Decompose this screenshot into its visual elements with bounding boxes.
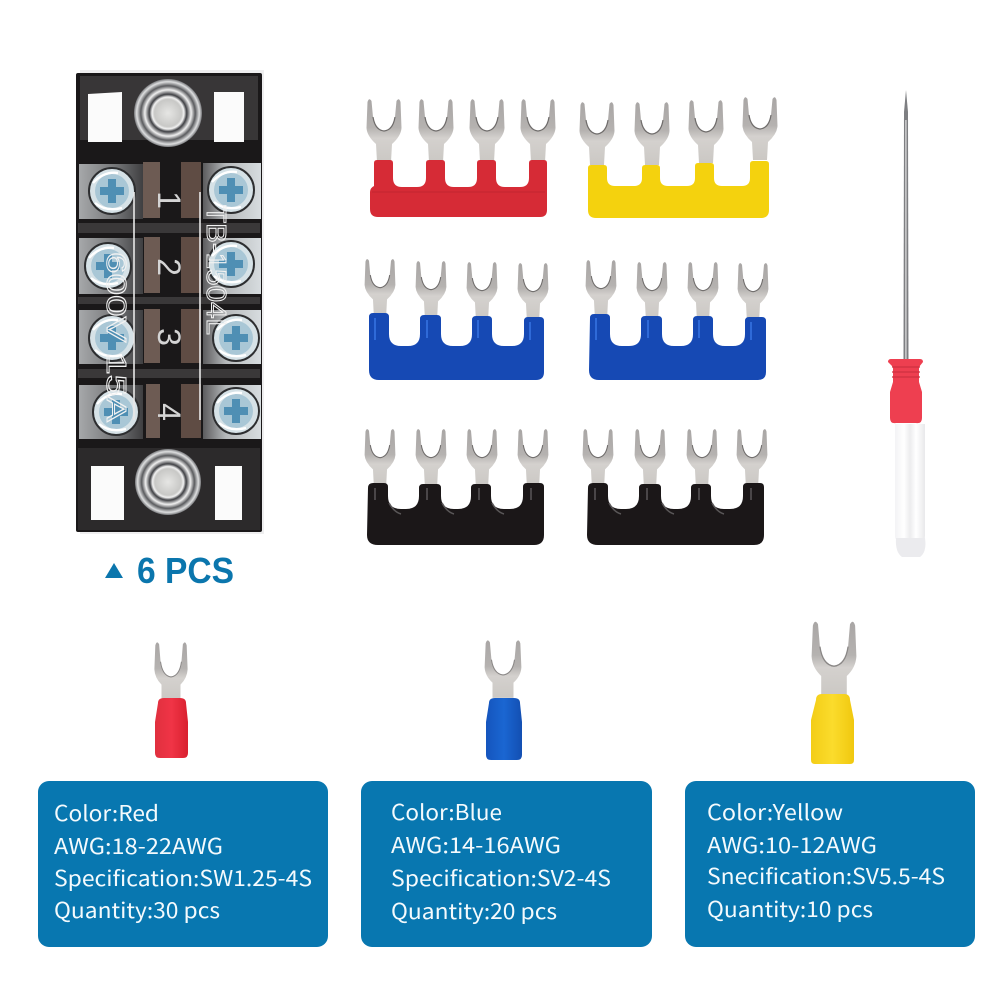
red spade terminal xyxy=(154,642,188,758)
bottom mounting bolt xyxy=(135,449,201,515)
terminal numbers xyxy=(151,191,187,421)
yellow jumper bar xyxy=(580,97,778,218)
card text: Color:Blue xyxy=(391,796,502,827)
screwdriver xyxy=(888,90,925,557)
card text: Quantity:20 pcs xyxy=(391,895,557,926)
card text xyxy=(391,796,611,926)
card text: Color:Yellow xyxy=(707,796,843,827)
screws xyxy=(85,167,259,435)
terminal numbers: 3 xyxy=(151,328,187,346)
card: blue spec xyxy=(361,781,652,947)
moulded rating text: TB-1504L xyxy=(201,205,232,335)
terminal block xyxy=(76,70,264,534)
card text: AWG:14-16AWG xyxy=(391,829,561,860)
blue jumper bar left xyxy=(365,259,548,380)
card text: Specification:SW1.25-4S xyxy=(54,862,312,893)
top mounting bolt xyxy=(134,79,202,147)
blue jumper bar right xyxy=(586,260,768,380)
card text: Quantity:10 pcs xyxy=(707,893,873,924)
card: yellow spec xyxy=(685,781,975,947)
card text xyxy=(54,797,312,925)
terminal numbers: 4 xyxy=(151,403,187,421)
blue spade terminal xyxy=(485,640,522,760)
terminal numbers: 2 xyxy=(151,258,187,276)
card text: AWG:10-12AWG xyxy=(707,829,877,860)
card text: AWG:18-22AWG xyxy=(54,830,223,861)
quantity label: 6 PCS xyxy=(137,550,234,591)
card text xyxy=(707,796,945,924)
terminal rows xyxy=(78,162,261,439)
card text: Snecification:SV5.5-4S xyxy=(707,860,945,891)
black jumper bar left xyxy=(365,429,548,545)
red jumper bar xyxy=(366,99,556,217)
yellow spade terminal xyxy=(811,622,856,764)
terminal numbers: 1 xyxy=(151,191,187,209)
moulded rating text xyxy=(101,205,232,422)
card: red spec xyxy=(38,781,328,947)
white mounting windows xyxy=(88,92,244,520)
moulded lines xyxy=(134,192,200,420)
card text: Specification:SV2-4S xyxy=(391,862,611,893)
moulded rating text: 600V 15A xyxy=(101,252,132,422)
card text: Quantity:30 pcs xyxy=(54,894,220,925)
card text: Color:Red xyxy=(54,797,159,828)
black jumper bar right xyxy=(583,429,767,545)
